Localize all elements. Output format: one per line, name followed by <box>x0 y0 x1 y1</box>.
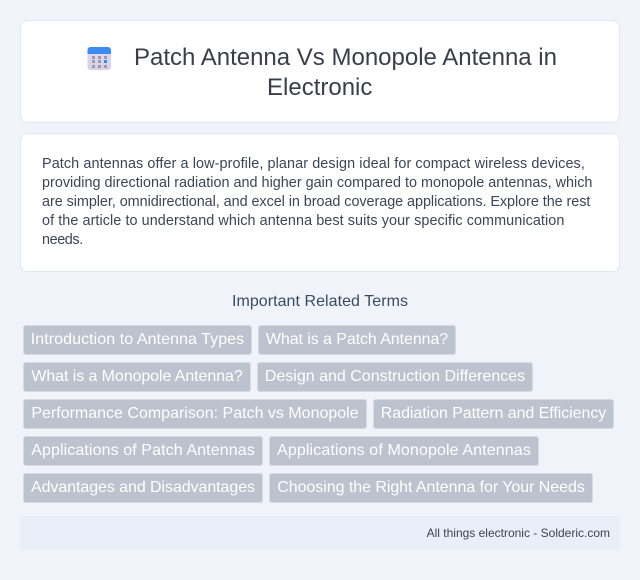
related terms tags: Design and Construction Differences <box>265 368 525 385</box>
related terms heading: Important Related Terms <box>232 293 408 310</box>
title: Patch Antenna Vs Monopole Antenna in <box>134 44 557 71</box>
title: Electronic <box>267 74 372 101</box>
related terms tags: Radiation Pattern and Efficiency <box>381 405 606 422</box>
intro text: providing directional radiation and higher gain compared to monopole antennas, which <box>42 175 592 191</box>
intro text: are simpler, omnidirectional, and excel in broad coverage applications. Explore the rest <box>42 194 590 210</box>
intro text panel <box>20 133 620 272</box>
related terms tags: Applications of Patch Antennas <box>31 442 255 459</box>
related terms tags: Advantages and Disadvantages <box>31 479 255 496</box>
intro text: needs. <box>42 232 83 248</box>
title <box>134 44 557 101</box>
related terms tags: Performance Comparison: Patch vs Monopole <box>31 405 359 422</box>
related terms tags: Applications of Monopole Antennas <box>277 442 531 459</box>
related terms tags: Introduction to Antenna Types <box>31 331 244 348</box>
intro text: of the article to understand which antenna best suits your specific communication <box>42 213 564 229</box>
related terms tags: Choosing the Right Antenna for Your Needs <box>277 479 585 496</box>
footer: All things electronic - Solderic.com <box>427 526 610 540</box>
footer <box>20 516 620 550</box>
header card <box>20 20 620 123</box>
related terms tags <box>23 325 614 503</box>
related terms tags: What is a Monopole Antenna? <box>31 368 243 385</box>
icon: calendar <box>88 47 111 70</box>
related terms tags: What is a Patch Antenna? <box>266 331 448 348</box>
intro text <box>42 156 592 248</box>
intro text: Patch antennas offer a low-profile, planar design ideal for compact wireless devices, <box>42 156 585 172</box>
